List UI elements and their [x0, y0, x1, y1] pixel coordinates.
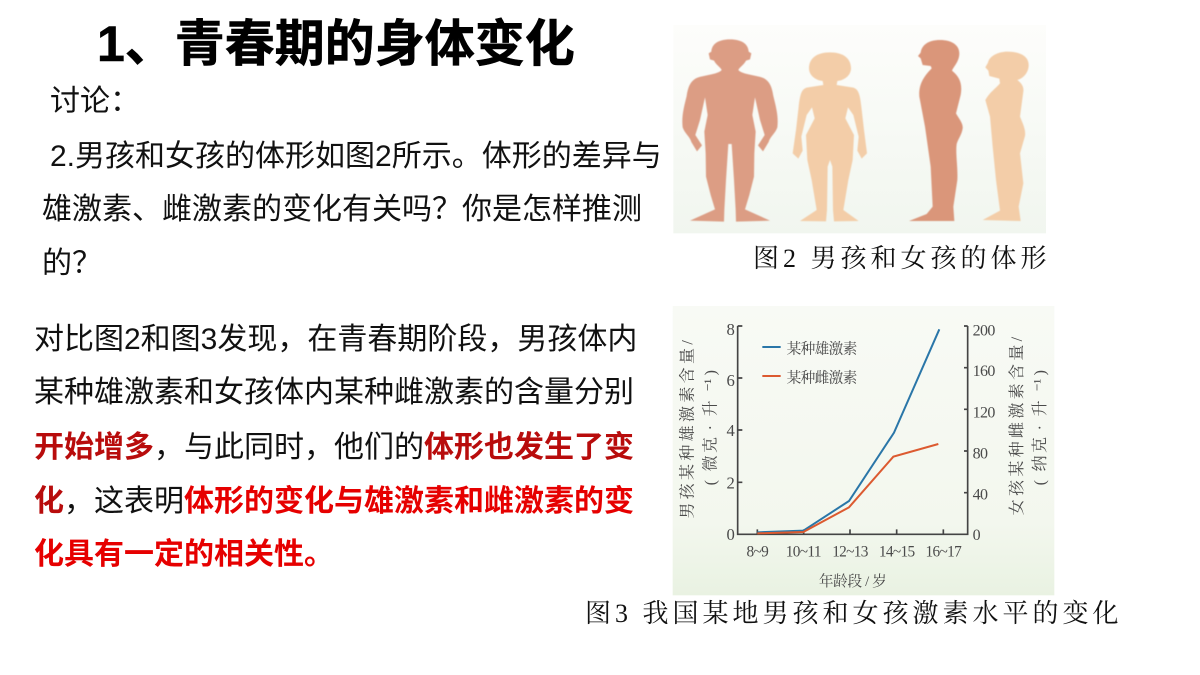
axes and ticks	[738, 326, 968, 534]
title: 1、青春期的身体变化	[97, 16, 575, 72]
x axis labels: 14~15	[879, 544, 915, 561]
left axis numbers: 0	[727, 525, 735, 544]
female side silhouette	[983, 52, 1029, 221]
discussion question: 的？	[42, 247, 102, 280]
right axis title: (纳克·升⁻¹)	[1030, 370, 1049, 485]
right axis numbers: 160	[973, 363, 995, 380]
x axis labels: 16~17	[926, 544, 962, 561]
right axis title: 女孩某种雌激素含量/	[1008, 334, 1026, 515]
left axis numbers: 2	[727, 473, 735, 492]
left axis title: (微克·升⁻¹)	[702, 370, 720, 485]
answer paragraph	[34, 323, 637, 571]
legend: 某种雄激素	[787, 339, 858, 357]
right axis numbers	[973, 322, 995, 544]
male hormone line	[757, 329, 939, 532]
right axis numbers: 40	[973, 486, 988, 503]
left axis numbers: 6	[727, 371, 735, 390]
right axis numbers: 120	[973, 404, 995, 421]
x axis labels: 10~11	[786, 544, 821, 561]
discussion question: 雄激素、雌激素的变化有关吗？你是怎样推测	[42, 193, 642, 226]
left axis title	[679, 337, 720, 519]
answer paragraph: 化，这表明体形的变化与雄激素和雌激素的变	[34, 485, 634, 518]
legend: 某种雌激素	[787, 369, 858, 387]
female front silhouette	[793, 52, 867, 221]
left axis numbers	[727, 320, 736, 544]
answer paragraph: 化具有一定的相关性。	[34, 538, 334, 571]
discussion heading: 讨论：	[50, 85, 140, 118]
left axis title: 男孩某种雄激素含量/	[679, 337, 697, 519]
right axis numbers: 0	[973, 527, 981, 544]
answer paragraph: 某种雄激素和女孩体内某种雌激素的含量分别	[34, 376, 634, 409]
right axis title	[1008, 334, 1049, 515]
male front silhouette	[682, 39, 778, 222]
answer paragraph: 开始增多，与此同时，他们的体形也发生了变	[34, 431, 634, 464]
figure 2: body shapes	[674, 38, 1046, 234]
discussion question	[42, 140, 662, 280]
left axis numbers: 8	[727, 320, 735, 339]
answer paragraph: 对比图2和图3发现，在青春期阶段，男孩体内	[34, 323, 637, 356]
left axis numbers: 4	[727, 421, 736, 440]
female hormone line	[757, 444, 938, 533]
x axis labels	[747, 544, 962, 561]
right axis numbers: 200	[973, 322, 995, 339]
right axis numbers: 80	[973, 446, 988, 463]
x axis labels: 12~13	[832, 544, 869, 561]
figure 3 caption: 图3 我国某地男孩和女孩激素水平的变化	[585, 599, 1123, 628]
x axis labels: 8~9	[747, 544, 769, 561]
figure 3: hormone line chart	[672, 306, 1054, 596]
x axis title: 年龄段 / 岁	[819, 572, 887, 590]
figure 2 caption: 图2 男孩和女孩的体形	[753, 244, 1051, 273]
legend	[762, 339, 858, 387]
male side silhouette	[909, 40, 963, 221]
discussion question: 2.男孩和女孩的体形如图2所示。体形的差异与	[50, 140, 662, 173]
